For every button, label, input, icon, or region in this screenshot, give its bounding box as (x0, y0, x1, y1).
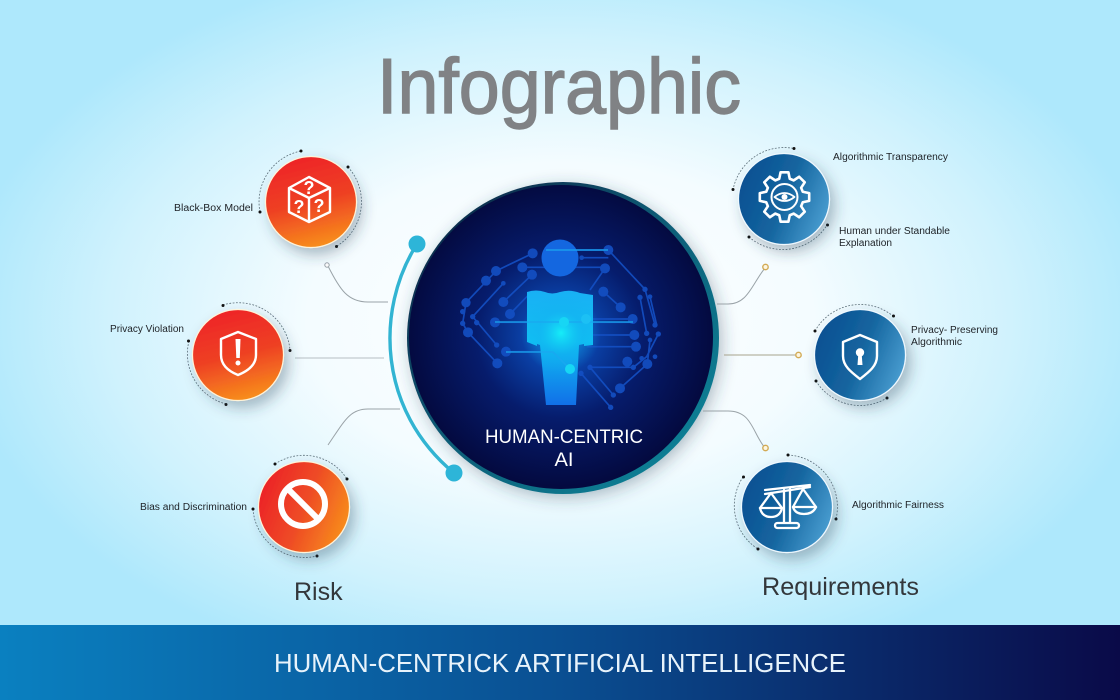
icon: alert shield (221, 332, 256, 375)
label: Algorithmic Transparency (833, 152, 948, 163)
label: Human under Standable (839, 226, 950, 237)
icon: gear with eye (760, 172, 809, 222)
icon: human figure (495, 240, 633, 405)
label (839, 226, 950, 249)
arc connector (390, 236, 462, 482)
label: Bias and Discrimination (140, 502, 247, 513)
icon: question cube (289, 177, 330, 222)
dashed orbit (814, 304, 895, 405)
label: Algorithmic (911, 337, 962, 348)
heading: Risk: Risk (294, 578, 343, 606)
label (911, 325, 998, 348)
icon: balance scales (760, 485, 816, 528)
requirement item: Algorithmic Fairness (734, 454, 944, 552)
dashed orbit (252, 455, 348, 558)
label: Algorithmic Fairness (852, 500, 944, 511)
label: Explanation (839, 238, 892, 249)
icon: question cube: ? (304, 178, 314, 198)
risk item: Black-Box Model (174, 150, 361, 248)
label: Black-Box Model (174, 203, 253, 214)
hub label: AI (554, 449, 574, 471)
icon: prohibited sign (281, 482, 325, 526)
icon: keyhole shield (843, 335, 877, 379)
dashed orbit (258, 150, 361, 248)
panel: central hub (407, 182, 719, 494)
hub label: HUMAN-CENTRIC (485, 426, 643, 448)
connector lines (295, 263, 801, 451)
title: Infographic (377, 42, 741, 130)
risk item: Privacy Violation (110, 303, 292, 406)
dashed orbit (734, 454, 838, 550)
footer banner: HUMAN-CENTRICK ARTIFICIAL INTELLIGENCE (274, 648, 846, 678)
label: Privacy Violation (110, 324, 184, 335)
icon: question cube: ? (314, 196, 324, 216)
dashed orbit (732, 147, 829, 250)
requirement item: Algorithmic Transparency (732, 147, 950, 250)
heading: Requirements: Requirements (762, 573, 919, 601)
icon: circuit brain (460, 245, 661, 410)
hub disc (407, 182, 719, 494)
footer banner (0, 625, 1120, 700)
dashed orbit (187, 303, 292, 406)
hub label (485, 426, 643, 471)
requirement item: Privacy-Preserving (814, 304, 998, 405)
risk item: Bias and Discrimination (140, 455, 350, 558)
icon: question cube: ? (294, 197, 304, 217)
label: Privacy- Preserving (911, 325, 998, 336)
